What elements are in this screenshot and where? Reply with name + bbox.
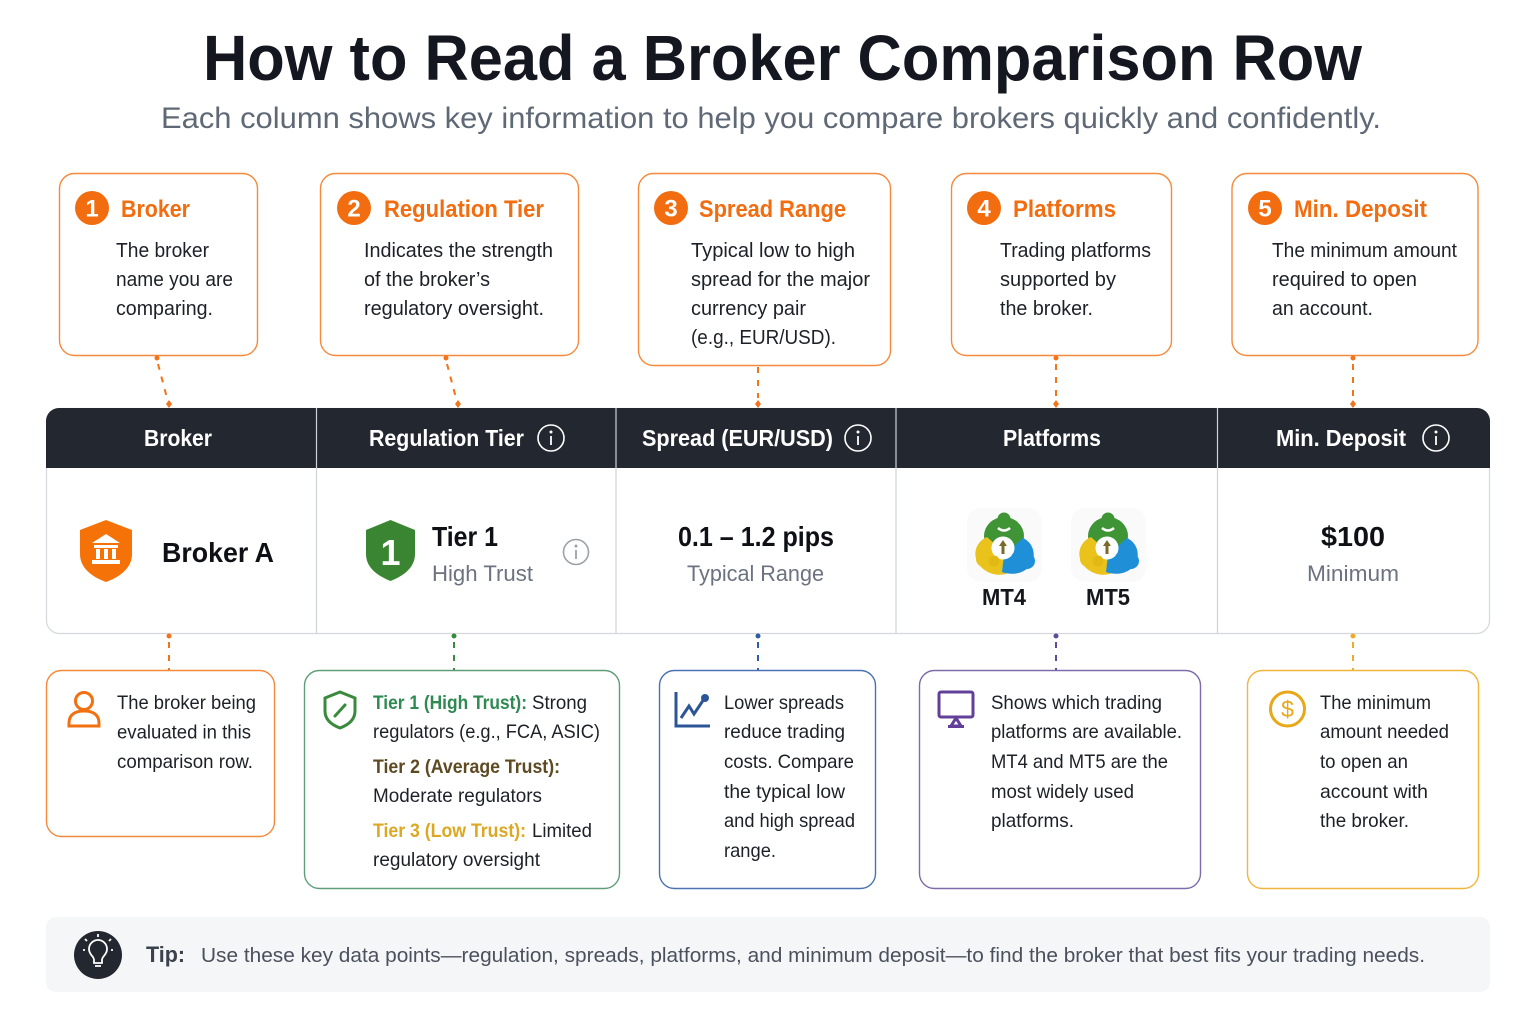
panel: tip bar — [46, 917, 1490, 992]
panel: platforms callout: 4 — [977, 196, 991, 222]
panel: deposit note: account with — [1320, 781, 1428, 803]
spread value: 0.1 – 1.2 pips — [678, 521, 834, 552]
panel: spread note: and high spread — [724, 810, 855, 832]
panel: regulation tier callout: Regulation Tier — [384, 196, 544, 223]
panel: platforms callout: Platforms — [1013, 196, 1116, 223]
panel: spread note: costs. Compare — [724, 751, 854, 773]
panel: regulation note: Limited — [532, 820, 592, 842]
panel: broker note: The broker being — [117, 692, 256, 714]
panel: platforms note: platforms are available. — [991, 721, 1182, 743]
header: min deposit: Min. Deposit — [1276, 425, 1406, 451]
panel: regulation note: Moderate regulators — [373, 785, 542, 807]
icon: MT4 — [967, 508, 1042, 582]
panel: deposit note — [1248, 670, 1478, 888]
icon: dollar coin — [1270, 692, 1304, 726]
header: broker: Broker — [144, 425, 212, 451]
icon: light bulb — [74, 931, 122, 979]
panel: broker callout: Broker — [121, 196, 190, 223]
arrow: tier row to note — [452, 634, 456, 670]
panel: broker note — [46, 670, 274, 836]
panel: regulation note: Tier 3 (Low Trust): — [373, 820, 526, 842]
panel: broker callout: comparing. — [116, 298, 213, 320]
panel: broker callout: The broker — [116, 240, 209, 262]
MT4 label: MT4 — [982, 584, 1026, 610]
panel: platforms callout: Trading platforms — [1000, 240, 1151, 262]
panel: broker callout — [60, 174, 258, 356]
column dividers — [316, 408, 1218, 634]
panel: deposit note: amount needed — [1320, 721, 1449, 743]
panel: regulation note: Tier 2 (Average Trust): — [373, 756, 560, 778]
header: platforms: Platforms — [1003, 425, 1101, 451]
panel: spread range callout — [638, 174, 890, 366]
panel: platforms note: most widely used — [991, 781, 1134, 803]
spread label: Typical Range — [687, 561, 824, 586]
title: How to Read a Broker Comparison Row — [203, 22, 1362, 94]
panel: spread range callout: 3 — [664, 196, 678, 222]
arrow: deposit row to note — [1351, 634, 1355, 670]
panel: regulation note — [304, 670, 620, 888]
panel: min deposit callout: an account. — [1272, 298, 1373, 320]
panel: min deposit callout: Min. Deposit — [1294, 196, 1427, 223]
panel: min deposit callout: required to open — [1272, 269, 1417, 291]
deposit value: $100 — [1321, 521, 1385, 552]
header: spread: Spread (EUR/USD) — [642, 425, 833, 451]
panel: spread range callout: Spread Range — [699, 196, 846, 223]
MT5 label: MT5 — [1086, 584, 1130, 610]
panel: regulation tier callout: Indicates the strength — [364, 240, 553, 262]
table header bar — [46, 408, 1490, 468]
panel: regulation tier callout — [320, 174, 578, 356]
icon: dollar coin: $ — [1281, 696, 1294, 722]
panel: spread range callout: Typical low to high — [691, 240, 855, 262]
panel: spread note: range. — [724, 840, 776, 862]
icon: tier 1 shield: 1 — [380, 532, 401, 573]
panel: deposit note: the broker. — [1320, 810, 1409, 832]
panel: spread note: reduce trading — [724, 721, 845, 743]
icon: person — [69, 692, 99, 726]
panel: min deposit callout: The minimum amount — [1272, 240, 1457, 262]
panel: platforms callout: the broker. — [1000, 298, 1093, 320]
panel: spread note: the typical low — [724, 781, 846, 803]
panel: regulation tier callout: of the broker’s — [364, 269, 490, 291]
panel: tip bar: Use these key data points—regulation, spreads, platforms, and minimum deposit—to find the broker that best fits your trading needs. — [201, 944, 1425, 967]
deposit label: Minimum — [1307, 561, 1399, 586]
panel: spread note: Lower spreads — [724, 692, 844, 714]
arrow: spread callout to header — [755, 367, 761, 408]
panel: broker note: evaluated in this — [117, 722, 251, 744]
panel: deposit note: The minimum — [1320, 692, 1431, 714]
icon: broker shield — [80, 520, 132, 582]
panel: platforms note: Shows which trading — [991, 692, 1162, 714]
panel: deposit note: to open an — [1320, 751, 1408, 773]
panel: spread note — [660, 670, 876, 888]
panel: platforms note: platforms. — [991, 810, 1074, 832]
panel: regulation tier callout: regulatory oversight. — [364, 298, 544, 320]
panel: spread range callout: currency pair — [691, 298, 806, 320]
tier label: High Trust — [432, 561, 534, 586]
panel: min deposit callout — [1232, 174, 1478, 356]
panel: broker callout: 1 — [85, 196, 99, 222]
arrow: spread row to note — [756, 634, 760, 670]
arrow: deposit callout to header — [1350, 356, 1356, 408]
arrow: broker row to note — [167, 634, 171, 670]
arrow: platforms row to note — [1054, 634, 1058, 670]
icon: MT5 — [1071, 508, 1146, 582]
panel: platforms callout — [952, 174, 1172, 356]
panel: broker callout: name you are — [116, 269, 233, 291]
panel: platforms callout: supported by — [1000, 269, 1116, 291]
panel: min deposit callout: 5 — [1258, 196, 1272, 222]
icon: line chart — [676, 692, 710, 726]
panel: spread range callout: spread for the major — [691, 269, 870, 291]
comparison table — [46, 408, 1490, 634]
tier value: Tier 1 — [432, 521, 498, 552]
panel: platforms note — [920, 670, 1200, 888]
panel: spread range callout: (e.g., EUR/USD). — [691, 327, 836, 349]
arrow: platforms callout to header — [1053, 356, 1059, 408]
panel: regulation tier callout: 2 — [347, 196, 361, 222]
panel: platforms note: MT4 and MT5 are the — [991, 751, 1168, 773]
panel: tip bar: Tip: — [146, 942, 185, 967]
panel: regulation note: regulators (e.g., FCA, ASIC) — [373, 721, 600, 743]
arrow: broker callout to header — [155, 356, 172, 408]
icon: shield outline — [325, 692, 355, 728]
subtitle: Each column shows key information to help you compare brokers quickly and confidently. — [161, 102, 1381, 135]
panel: regulation note: regulatory oversight — [373, 849, 541, 871]
icon: tier 1 shield — [366, 520, 415, 581]
icon: info — [564, 540, 588, 564]
header: regulation tier: Regulation Tier — [369, 425, 524, 451]
panel: regulation note: Tier 1 (High Trust): — [373, 692, 527, 714]
arrow: regulation callout to header — [444, 356, 461, 408]
broker name: Broker A — [162, 537, 274, 568]
panel: broker note: comparison row. — [117, 751, 253, 773]
panel: regulation note: Strong — [532, 692, 587, 714]
icon: monitor — [939, 692, 973, 726]
